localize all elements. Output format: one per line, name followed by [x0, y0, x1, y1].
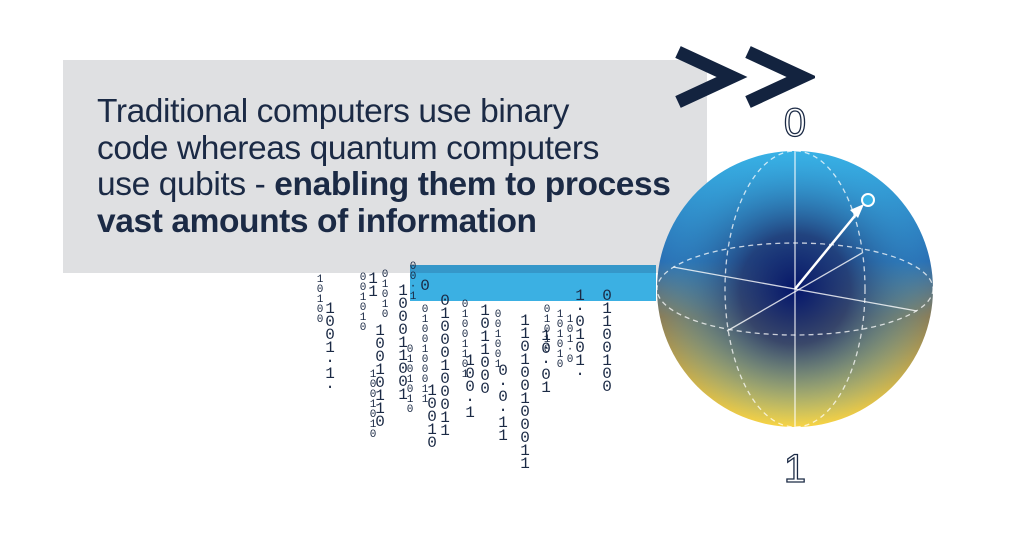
text: 0 [557, 339, 563, 351]
text: 1 [498, 414, 508, 432]
text: 0 [480, 354, 490, 372]
text: 0 [360, 322, 366, 334]
text: 0 [360, 272, 366, 284]
text: 0 [495, 319, 501, 331]
text: 1 [440, 422, 450, 440]
text: 1 [544, 314, 550, 326]
text: 0 [422, 374, 428, 386]
text: 0 [360, 302, 366, 314]
text: 0 [382, 269, 388, 281]
text: · [325, 352, 335, 370]
text: 0 [495, 339, 501, 351]
text: 0 [382, 289, 388, 301]
text: 0 [422, 324, 428, 336]
text: 0 [567, 354, 573, 366]
text: · [498, 375, 508, 393]
bloch sphere [657, 101, 933, 490]
text: 1 [541, 327, 551, 345]
text: 0 [410, 271, 416, 283]
text: 1 [422, 384, 428, 396]
text: 1 [407, 394, 413, 406]
text: 1 [375, 400, 385, 418]
text: 0 [422, 364, 428, 376]
text: 0 [557, 359, 563, 371]
text: 1 [462, 339, 468, 351]
heading text: vast amounts of information [97, 202, 537, 240]
text: 1 [325, 339, 335, 357]
text: 0 [410, 261, 416, 273]
text: 0 [465, 365, 475, 383]
text: 1 [575, 287, 585, 305]
text: 1 [520, 442, 530, 460]
text: 1 [520, 351, 530, 369]
text: 0 [480, 315, 490, 333]
text: 0 [398, 308, 408, 326]
text: 1 [440, 305, 450, 323]
text: 1 [368, 270, 378, 288]
text: 1 [462, 369, 468, 381]
text: 0 [398, 321, 408, 339]
text: 0 [495, 309, 501, 321]
text: 1 [325, 365, 335, 383]
heading text: Traditional computers use binary [97, 93, 569, 130]
text: · [410, 281, 416, 293]
text: 1 [375, 387, 385, 405]
text: 1 [398, 282, 408, 300]
heading text: code whereas quantum computers [97, 130, 599, 166]
text: 0 [398, 373, 408, 391]
text: 0 [440, 331, 450, 349]
text: 0 [465, 378, 475, 396]
text: 0 [407, 364, 413, 376]
text: 0 [520, 338, 530, 356]
text: 0 [325, 313, 335, 331]
text: 0 [520, 403, 530, 421]
text: 1 [541, 379, 551, 397]
text: · [575, 300, 585, 318]
text: 1 [465, 352, 475, 370]
text: 0 [375, 348, 385, 366]
panel: grey text box [63, 60, 707, 273]
text: 1 [317, 294, 323, 306]
text: 1 [360, 292, 366, 304]
text: 0 [602, 378, 612, 396]
text: 0 [544, 324, 550, 336]
text: 1 [602, 352, 612, 370]
heading text: use qubits - enabling them to process [97, 166, 670, 203]
text: 1 [480, 302, 490, 320]
text: 1 [422, 314, 428, 326]
text: 1 [498, 427, 508, 445]
text: 0 [317, 314, 323, 326]
text: 0 [407, 384, 413, 396]
text: 1 [398, 334, 408, 352]
text: 0 [520, 377, 530, 395]
text: 1 [407, 374, 413, 386]
text: 0 [370, 429, 376, 441]
blue bar [410, 265, 656, 301]
text: 1 [440, 409, 450, 427]
text: 1 [410, 291, 416, 303]
text: 0 [440, 292, 450, 310]
text: · [465, 391, 475, 409]
text: 1 [465, 404, 475, 422]
text: 0 [398, 295, 408, 313]
text: 0 [498, 388, 508, 406]
text: 0 [440, 370, 450, 388]
text: 0 [557, 319, 563, 331]
text: 0 [317, 304, 323, 316]
text: 0 [370, 389, 376, 401]
text: 0 [440, 344, 450, 362]
text: · [567, 344, 573, 356]
text: 0 [317, 284, 323, 296]
text: 1 [370, 419, 376, 431]
text: 0 [602, 339, 612, 357]
text: 1 [360, 312, 366, 324]
text: 0 [427, 408, 437, 426]
icon: double chevron [675, 46, 815, 108]
text: 0 [462, 299, 468, 311]
text: 0 [495, 349, 501, 361]
text: 0 [407, 344, 413, 356]
text: 1 [368, 283, 378, 301]
text: 1 [375, 322, 385, 340]
text: 1 [602, 300, 612, 318]
text: 1 [557, 309, 563, 321]
text: 1 [480, 341, 490, 359]
text: 0 [541, 340, 551, 358]
text: 0 [370, 379, 376, 391]
text: 0 [422, 304, 428, 316]
text: 0 [602, 326, 612, 344]
text: 0 [375, 374, 385, 392]
text: 0 [544, 344, 550, 356]
text: 1 [520, 455, 530, 473]
text: 1 [557, 329, 563, 341]
text: 0 [427, 434, 437, 452]
text: 1 [602, 313, 612, 331]
text: 1 [382, 299, 388, 311]
text: 0 [420, 277, 430, 295]
text: 0 [422, 354, 428, 366]
text: 0 [422, 334, 428, 346]
text: 0 [462, 359, 468, 371]
heading text [97, 93, 670, 240]
text: 0 [382, 309, 388, 321]
text: 1 [427, 382, 437, 400]
text: 1 [567, 314, 573, 326]
text: 1 [398, 386, 408, 404]
text: 1 [422, 344, 428, 356]
text: 0 [360, 282, 366, 294]
text: · [498, 401, 508, 419]
text: 0 [407, 404, 413, 416]
text: 0 [370, 409, 376, 421]
text: 0 [462, 329, 468, 341]
text: · [575, 365, 585, 383]
text: 0 [480, 380, 490, 398]
text: 1 [422, 394, 428, 406]
text: 1 [407, 354, 413, 366]
text: 0 [480, 367, 490, 385]
text: 0 [440, 318, 450, 336]
text: · [541, 353, 551, 371]
text: 1 [375, 361, 385, 379]
text: 1 [495, 359, 501, 371]
text: 0 [541, 366, 551, 384]
text: 1 [575, 326, 585, 344]
text: 0 [462, 319, 468, 331]
text: 0 [440, 396, 450, 414]
text: 1 [520, 312, 530, 330]
label: 1: 1 [784, 447, 806, 490]
text: 1 [440, 357, 450, 375]
text: 1 [462, 309, 468, 321]
label: 0: 0 [784, 101, 806, 145]
text: 1 [382, 279, 388, 291]
text: 1 [495, 329, 501, 341]
text: 0 [427, 395, 437, 413]
text: 0 [602, 287, 612, 305]
text: 1 [557, 349, 563, 361]
binary rain [317, 261, 612, 473]
text: 1 [317, 274, 323, 286]
text: 1 [462, 349, 468, 361]
text: 0 [520, 416, 530, 434]
text: 1 [544, 334, 550, 346]
text: 0 [375, 335, 385, 353]
text: 1 [575, 352, 585, 370]
text: 0 [602, 365, 612, 383]
text: 0 [520, 364, 530, 382]
text: 1 [480, 328, 490, 346]
text: · [325, 378, 335, 396]
text: 1 [520, 390, 530, 408]
text: 1 [427, 421, 437, 439]
text: 0 [544, 304, 550, 316]
text: 0 [567, 324, 573, 336]
text: 1 [325, 300, 335, 318]
text: 1 [370, 399, 376, 411]
text: 0 [520, 429, 530, 447]
text: 0 [575, 339, 585, 357]
text: 0 [375, 413, 385, 431]
text: 0 [575, 313, 585, 331]
text: 1 [567, 334, 573, 346]
text: 1 [520, 325, 530, 343]
text: 0 [440, 383, 450, 401]
text: 1 [370, 369, 376, 381]
text: 1 [398, 347, 408, 365]
text: 0 [398, 360, 408, 378]
text: 0 [498, 362, 508, 380]
text: 0 [325, 326, 335, 344]
